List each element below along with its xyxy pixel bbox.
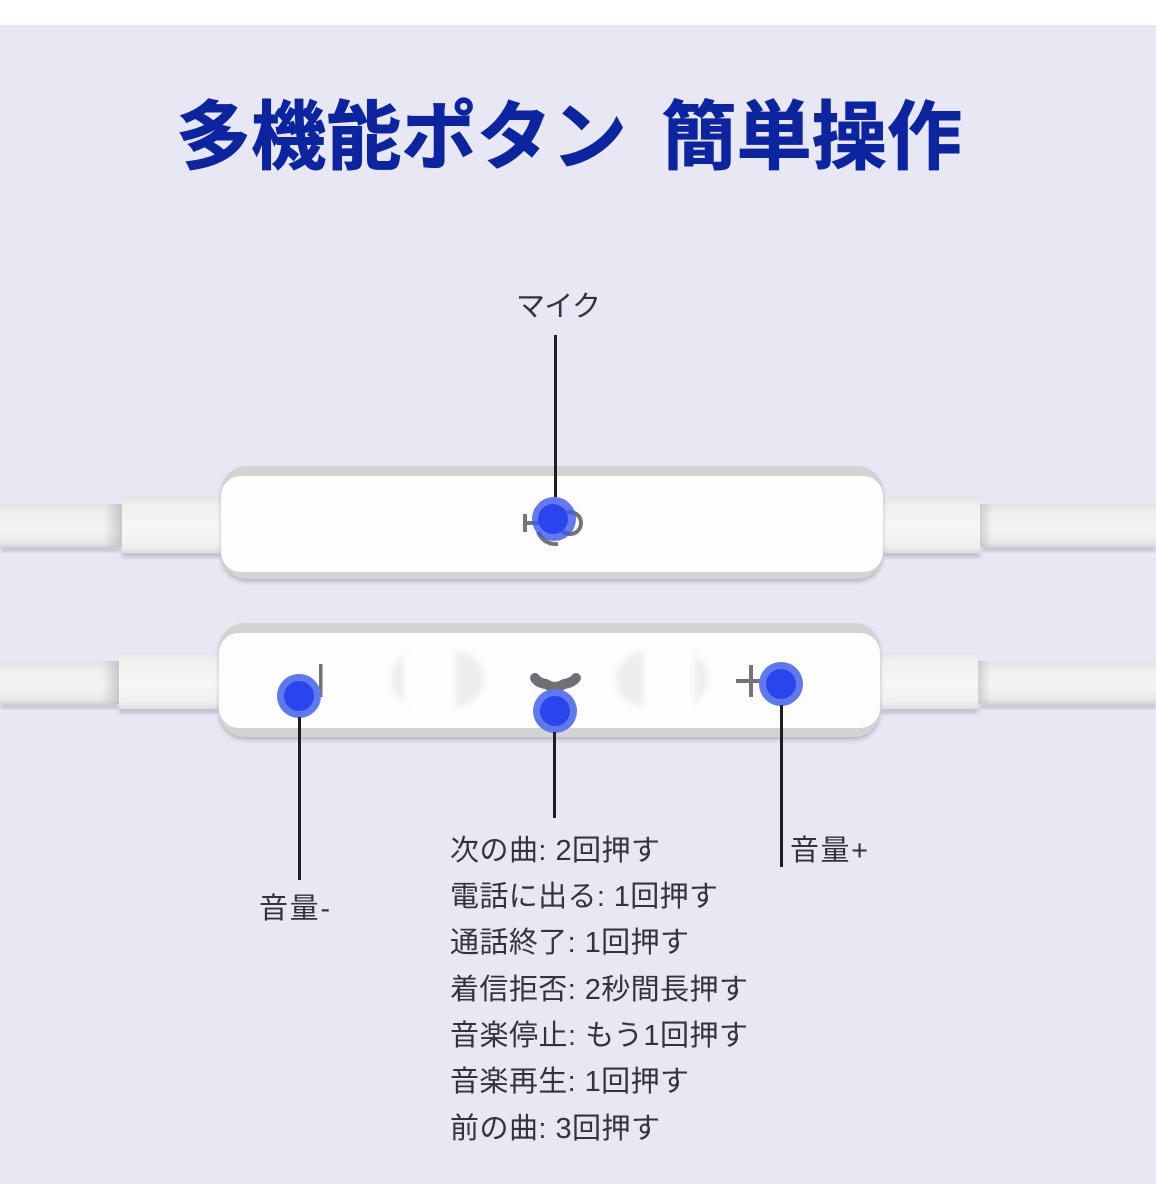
- cables and connectors: [0, 653, 1156, 713]
- icon: play button mark: [535, 678, 576, 687]
- upper remote: [0, 466, 1156, 582]
- lower remote: [0, 623, 1156, 740]
- marker: microphone: [532, 497, 576, 541]
- label: volume down: 音量-: [259, 892, 330, 925]
- icon: microphone: [525, 512, 581, 544]
- instructions list: 前の曲: 3回押す: [450, 1112, 660, 1145]
- cables and connectors: [0, 497, 1156, 557]
- instructions list: [450, 834, 748, 1145]
- instructions list: 通話終了: 1回押す: [450, 926, 689, 959]
- marker: volume down: [277, 674, 321, 718]
- marker: volume up: [759, 662, 803, 706]
- instructions list: 電話に出る: 1回押す: [450, 880, 718, 913]
- leader line: volume up: [780, 705, 783, 867]
- title: 多機能ポタン 簡単操作: [176, 76, 962, 185]
- marker: center button: [533, 689, 577, 733]
- label: volume up: 音量+: [790, 834, 868, 867]
- leader line: microphone: [554, 335, 557, 497]
- icon: minus: [319, 664, 322, 697]
- instructions list: 音楽停止: もう1回押す: [450, 1019, 748, 1052]
- instructions list: 音楽再生: 1回押す: [450, 1065, 689, 1098]
- left button recess: [391, 646, 484, 712]
- leader line: volume down: [298, 717, 301, 880]
- remote body: [219, 623, 880, 740]
- leader line: center button: [553, 732, 556, 818]
- remote body: [221, 466, 883, 582]
- instructions list: 着信拒否: 2秒間長押す: [450, 973, 748, 1006]
- icon: plus: [736, 665, 768, 697]
- right button recess: [616, 646, 708, 712]
- instructions list: 次の曲: 2回押す: [450, 834, 660, 867]
- label: microphone: マイク: [516, 291, 601, 323]
